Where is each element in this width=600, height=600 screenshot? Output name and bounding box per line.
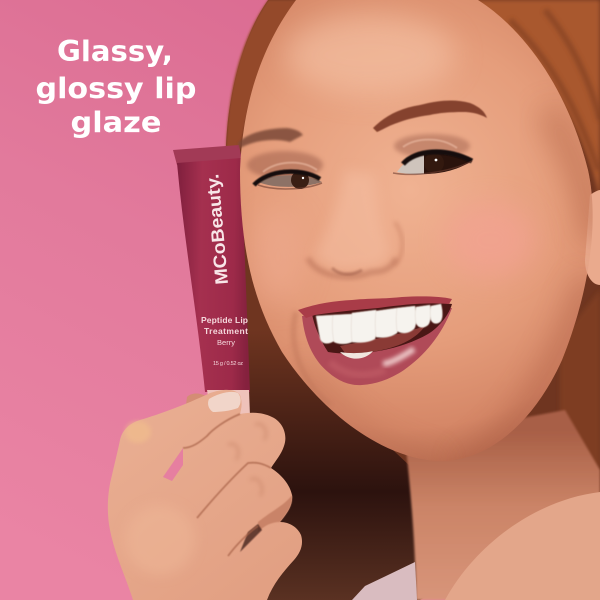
- mouth: [298, 296, 452, 385]
- product tube: [173, 145, 250, 418]
- headline: glossy lip: [36, 72, 196, 105]
- finger creases: [183, 414, 271, 556]
- headline: Glassy,: [57, 35, 173, 68]
- lip gloss highlight: [383, 349, 414, 364]
- product name on tube: [201, 315, 248, 367]
- left eyebrow: [238, 128, 303, 148]
- neck and shoulder: [352, 410, 600, 600]
- lower lip: [302, 308, 452, 385]
- upper teeth: [316, 304, 442, 344]
- upper lip: [298, 296, 452, 318]
- hand silhouette: [108, 390, 302, 600]
- nose shading: [308, 170, 402, 277]
- left eye: [247, 151, 323, 189]
- hand: [108, 390, 302, 600]
- pink gap between thumb and index: [163, 448, 183, 481]
- thumb nail: [208, 392, 241, 412]
- knuckle highlights: [125, 421, 151, 443]
- product name on tube: Berry: [217, 338, 235, 347]
- mouth interior: [312, 303, 452, 354]
- headline: glaze: [70, 106, 162, 139]
- face: [240, 0, 593, 461]
- product name on tube: 15 g / 0.52 oz: [213, 361, 243, 367]
- right eyebrow: [373, 101, 487, 132]
- hair: [226, 0, 600, 600]
- right eye: [393, 134, 472, 174]
- product name on tube: Treatment: [204, 326, 248, 336]
- lower teeth: [340, 351, 373, 359]
- finger behind tube: [186, 394, 206, 410]
- ear: [585, 190, 600, 285]
- shaded area under middle finger: [258, 495, 292, 532]
- headline: [36, 35, 196, 139]
- product name on tube: Peptide Lip: [201, 315, 248, 325]
- brand name on tube: MCoBeauty.: [202, 173, 232, 285]
- face shading: [252, 15, 595, 470]
